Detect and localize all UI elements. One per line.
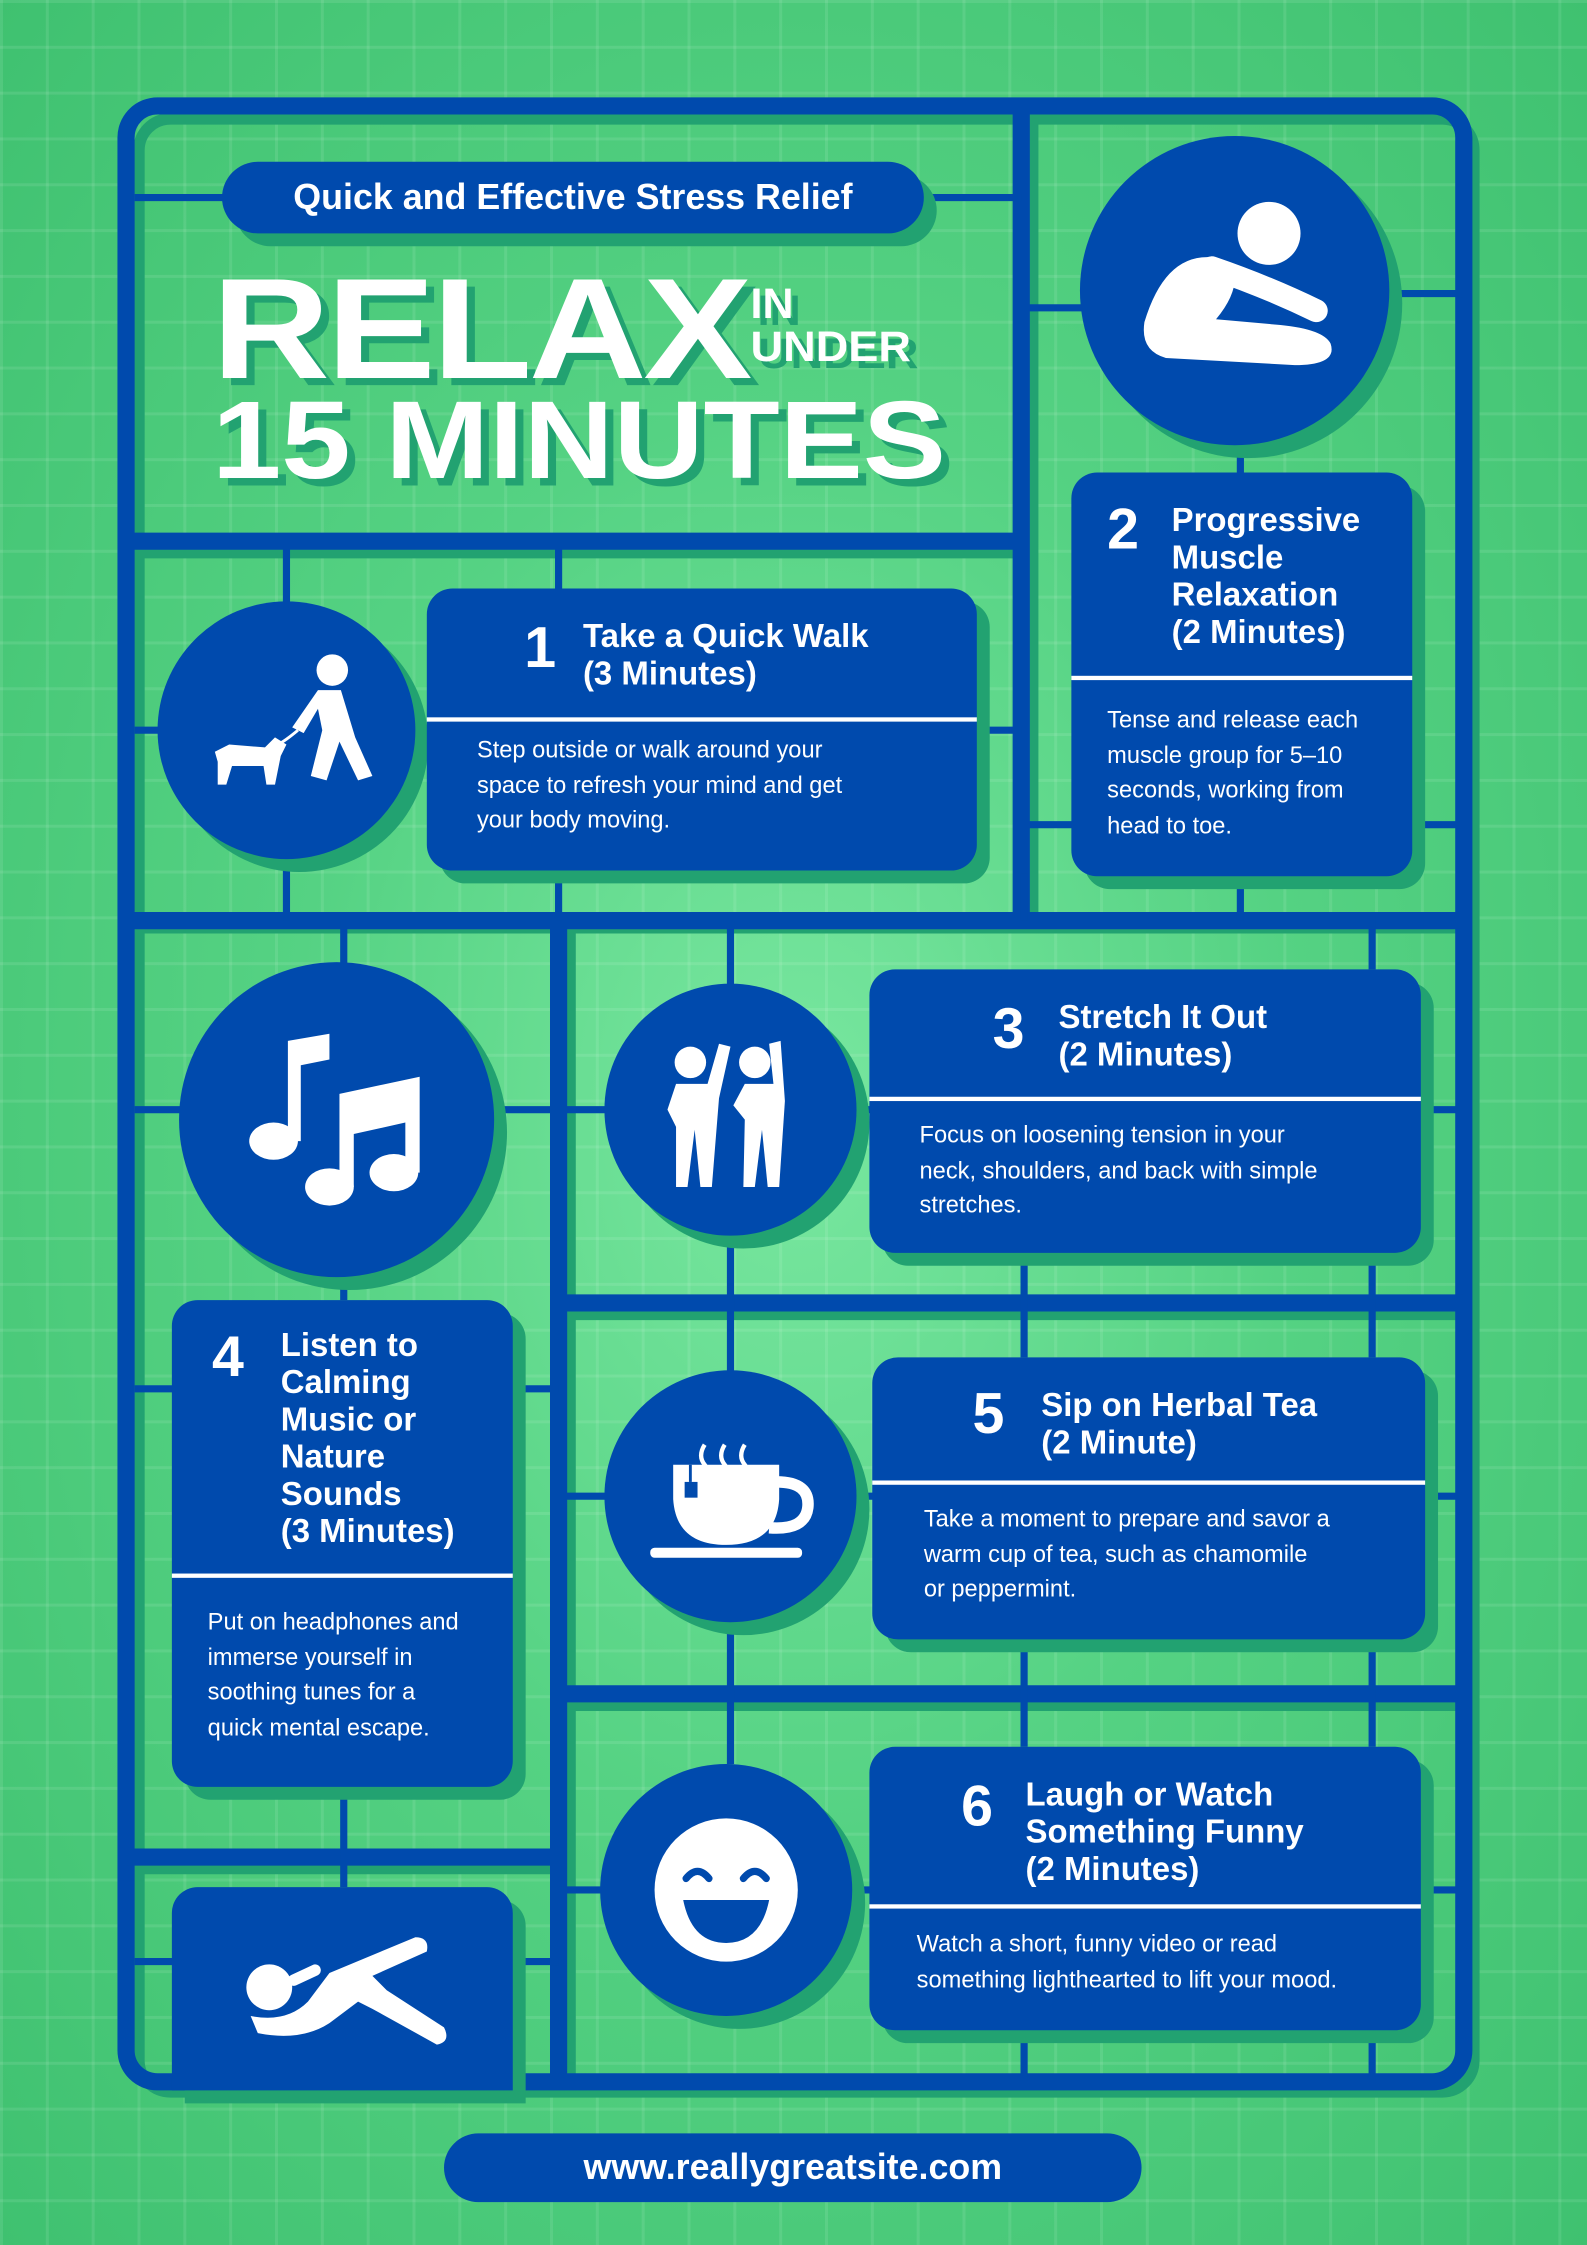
card 1 [427,588,977,871]
card 1: Take a Quick Walk [583,617,869,654]
card 2 [1071,472,1412,876]
card 5: warm cup of tea, such as chamomile [924,1541,1307,1567]
card 4: immerse yourself in [208,1644,413,1670]
card 2: seconds, working from [1107,777,1344,803]
card 3: Stretch It Out [1058,998,1267,1035]
card 3: 3 [993,998,1024,1061]
card 2: head to toe. [1107,813,1232,838]
card 4: Listen to [281,1326,418,1363]
card 3: stretches. [920,1193,1022,1218]
url pill [444,2133,1142,2202]
card 6: 6 [961,1775,993,1838]
icon: walking with dog [158,601,415,859]
card 4: Sounds [281,1475,402,1512]
card 5: or peppermint. [924,1576,1076,1602]
headline: IN [751,281,793,328]
icon: music notes [179,962,494,1277]
card 2: 2 [1107,498,1139,561]
icon: stretching person circle [1080,136,1389,445]
card 2: Progressive [1172,501,1360,538]
card 6: Watch a short, funny video or read [917,1931,1277,1957]
title pill: Quick and Effective Stress Relief [293,178,853,218]
card 4: quick mental escape. [208,1715,430,1740]
card 4 [172,1300,513,1787]
card 4: soothing tunes for a [208,1680,415,1705]
icon: tea cup [604,1370,857,1622]
card 2: muscle group for 5–10 [1107,742,1342,768]
card: lying person icon [172,1887,513,2090]
card 4: (3 Minutes) [281,1512,455,1549]
card 4: Nature [281,1438,385,1475]
card 5: Take a moment to prepare and savor a [924,1506,1330,1532]
card 2: Relaxation [1172,576,1338,613]
card 3: (2 Minutes) [1058,1035,1232,1072]
card 2: (2 Minutes) [1172,613,1345,650]
card 4: 4 [212,1326,244,1389]
card 4: Put on headphones and [208,1609,459,1635]
card 3 [869,969,1421,1253]
card 4: Calming [281,1363,411,1400]
headline: RELAX [212,249,749,409]
headline: UNDER [751,324,911,371]
card 5: (2 Minute) [1041,1423,1197,1460]
card 6: (2 Minutes) [1026,1850,1199,1887]
headline [212,249,950,503]
card 1: 1 [524,617,556,680]
card 2: Tense and release each [1107,707,1358,733]
card 3: neck, shoulders, and back with simple [920,1158,1318,1183]
card 5: 5 [973,1383,1004,1446]
card 5 [872,1357,1425,1639]
card 3: Focus on loosening tension in your [920,1123,1285,1148]
headline: 15 MINUTES [212,379,946,503]
card 2: Muscle [1172,538,1283,576]
url pill: www.reallygreatsite.com [583,2148,1002,2188]
icon: stretching people [604,984,857,1236]
card 4: Music or [281,1400,416,1438]
card 1: Step outside or walk around your [477,737,822,763]
card 5: Sip on Herbal Tea [1041,1386,1317,1423]
title pill [222,162,924,233]
card 6: Laugh or Watch [1026,1775,1273,1813]
card 1: (3 Minutes) [583,654,757,692]
card 6 [869,1747,1421,2030]
card 1: your body moving. [477,808,670,833]
icon: laughing face [600,1764,852,2016]
card 6: Something Funny [1026,1813,1304,1850]
card 1: space to refresh your mind and get [477,772,842,798]
card 6: something lighthearted to lift your mood. [917,1967,1337,1992]
